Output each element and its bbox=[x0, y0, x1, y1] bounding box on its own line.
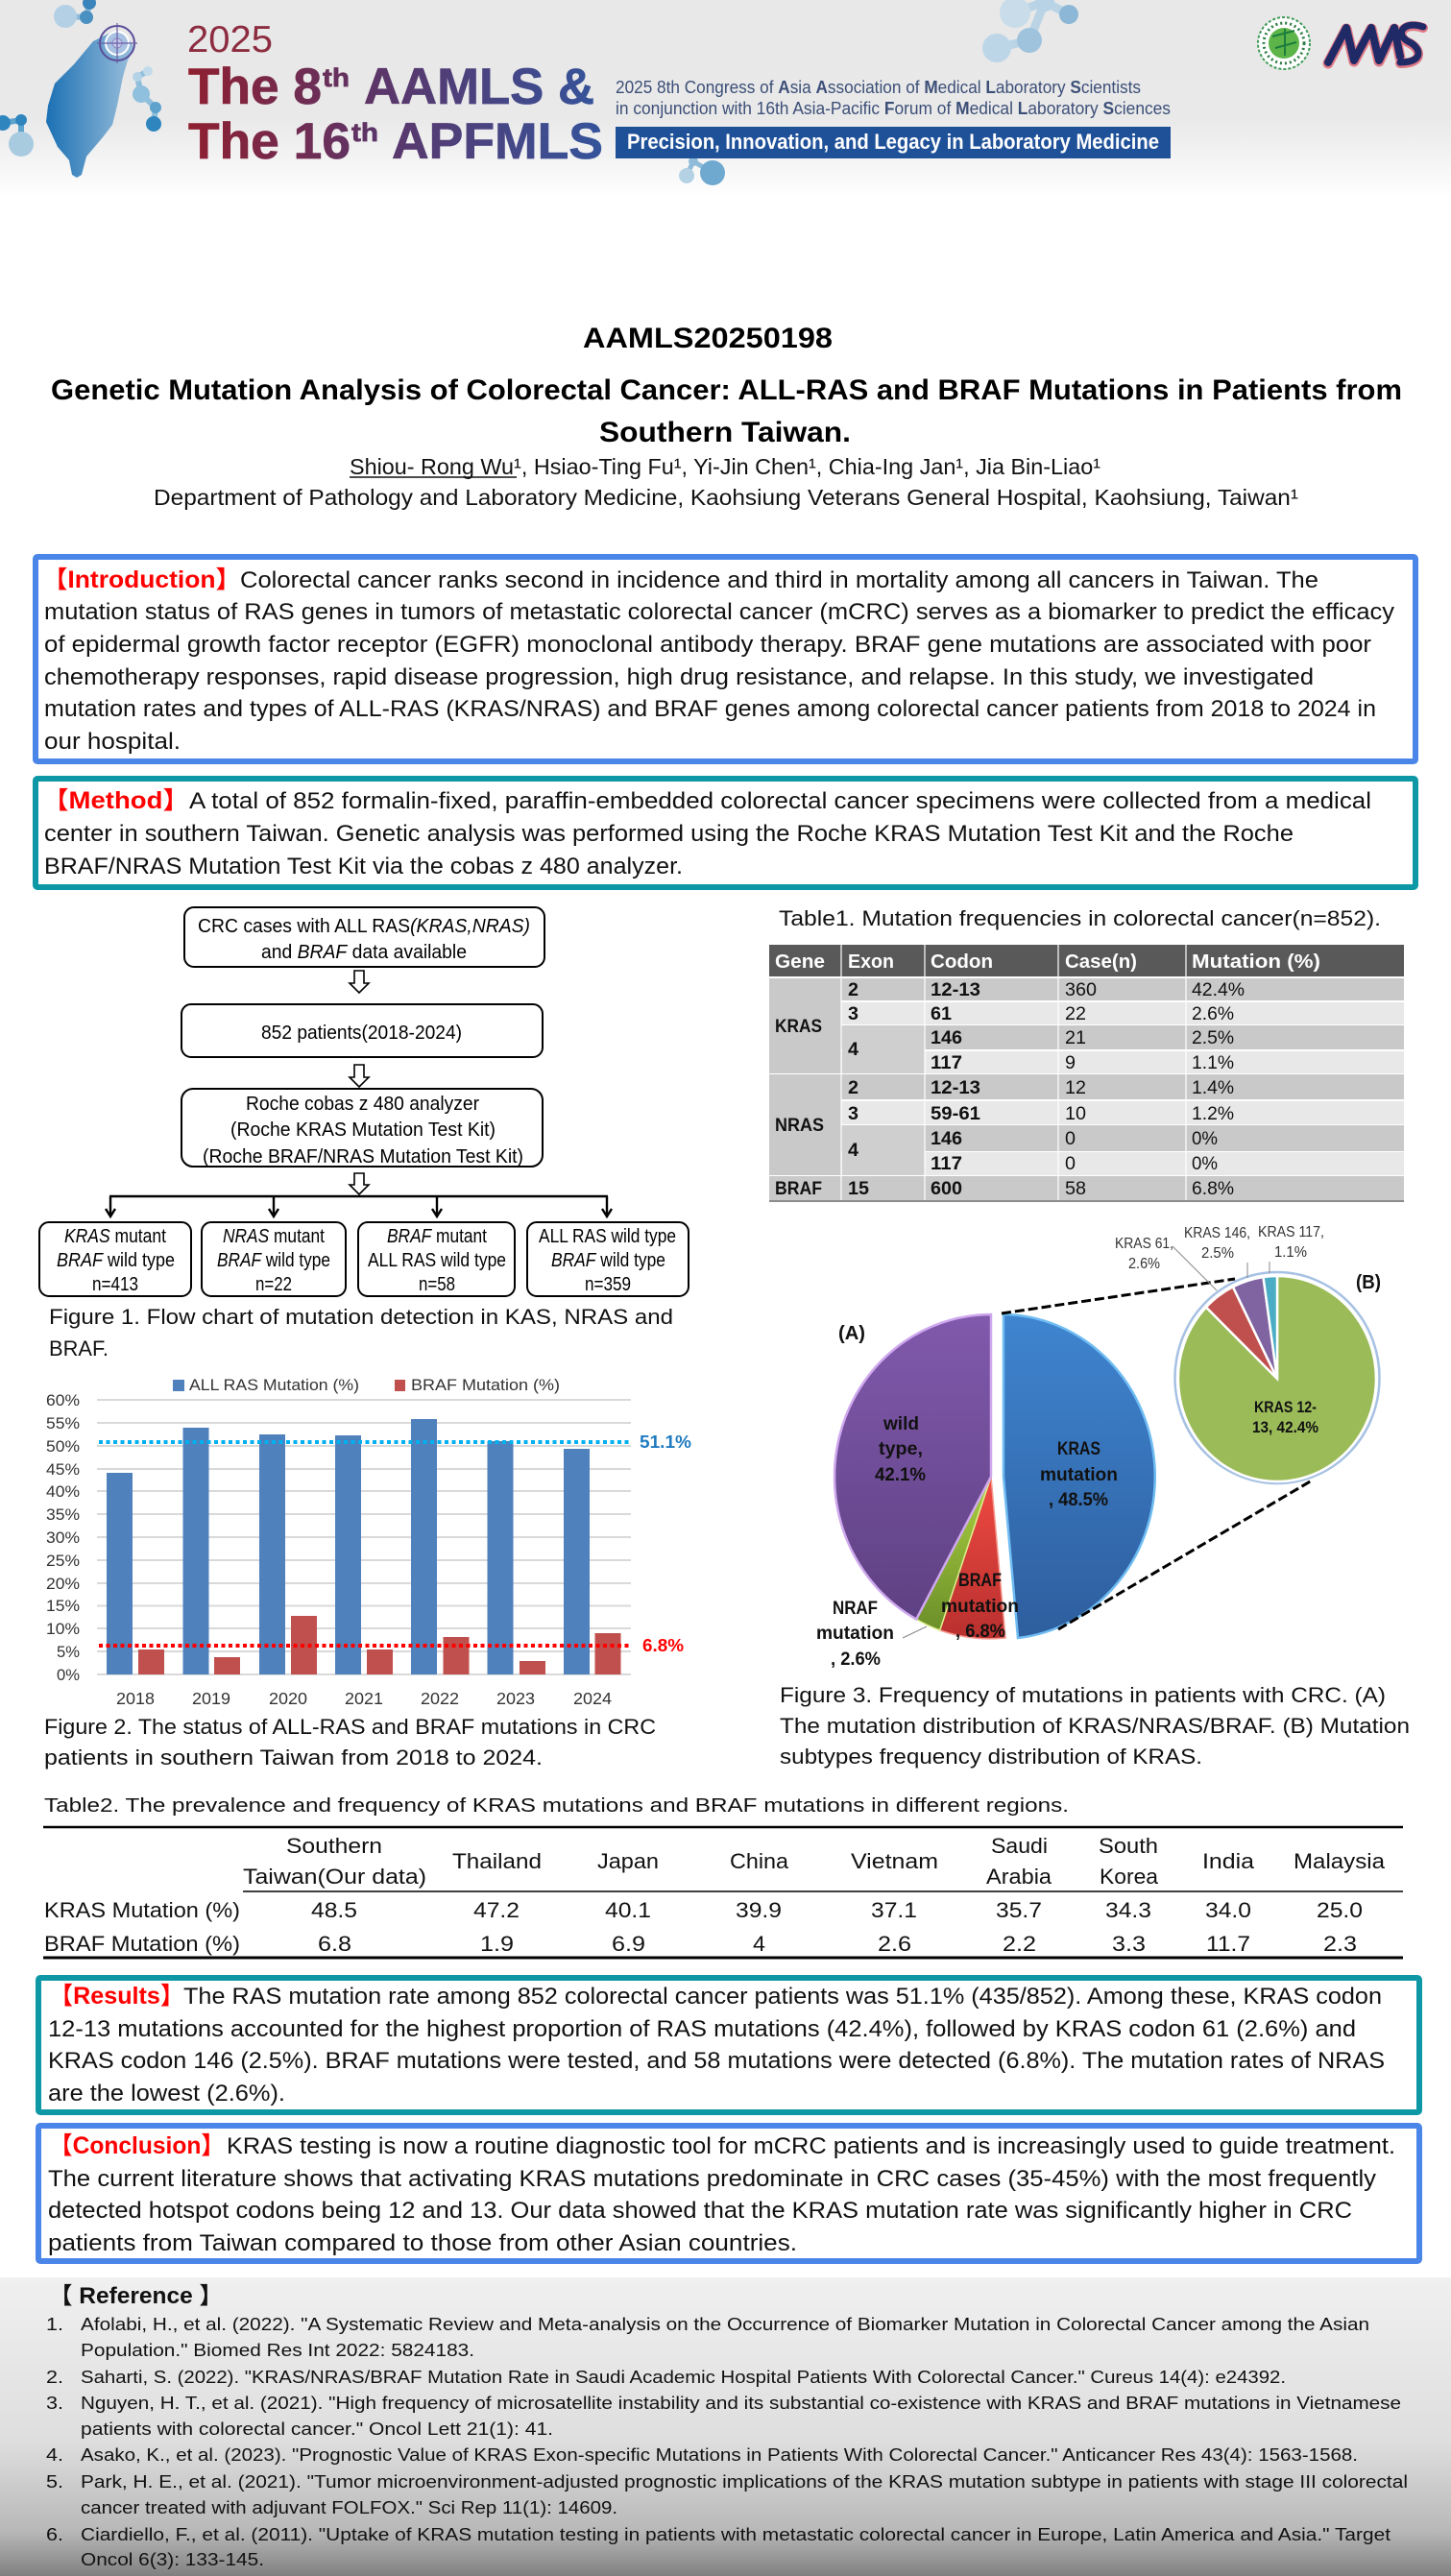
chart y axis: 35% bbox=[46, 1506, 80, 1524]
table 2 header: Arabia bbox=[986, 1865, 1052, 1889]
table 2 row: BRAF: 11.7 bbox=[1206, 1932, 1250, 1956]
banner title: The 8 bbox=[188, 59, 322, 115]
table 2 row: KRAS: 35.7 bbox=[996, 1898, 1042, 1922]
label: wild type slice: wild bbox=[883, 1413, 919, 1434]
chart y axis: 25% bbox=[46, 1553, 80, 1570]
label: KRAS 117 bbox=[1258, 1224, 1324, 1273]
heading: reference: 【 Reference 】 bbox=[49, 2283, 223, 2309]
table 2 header: India bbox=[1202, 1849, 1255, 1873]
table header bbox=[775, 951, 1320, 973]
icon: molecule decorations bbox=[0, 0, 1078, 185]
caption: figure 2: patients in southern Taiwan from 2018 to 2024. bbox=[44, 1745, 543, 1769]
chart x axis: 2022 bbox=[421, 1689, 459, 1708]
arrow: down 2 bbox=[350, 1065, 369, 1087]
banner title: APFMLS bbox=[392, 113, 603, 170]
bar chart: mutation by year bbox=[46, 1376, 691, 1708]
banner subtitle: 2025 8th Congress of Asia Association of Medical Laboratory Scientists bbox=[616, 77, 1141, 97]
table rows: KRAS: 3 bbox=[848, 1004, 859, 1024]
average line: BRAF bbox=[99, 1644, 631, 1648]
flow box: analyzer: Roche cobas z 480 analyzer bbox=[246, 1093, 479, 1115]
chart x axis: 2020 bbox=[269, 1689, 307, 1708]
panel: introduction bbox=[36, 557, 1415, 761]
caption: figure 1: BRAF. bbox=[49, 1336, 109, 1360]
flow box: CRC cases: and BRAF data available bbox=[261, 941, 467, 963]
label: wild type slice: type, bbox=[879, 1438, 923, 1459]
table rows: NRAS: 117 bbox=[931, 1154, 962, 1174]
table 2 header: Malaysia bbox=[1294, 1849, 1386, 1873]
text: introduction body: of epidermal growth factor receptor (EGFR) monoclonal antibody therapy. BRAF gene mutations are associated with poor bbox=[44, 632, 1371, 658]
flow box: patients bbox=[181, 1004, 543, 1057]
caption: table 2: Table2. The prevalence and frequency of KRAS mutations and BRAF mutations in different regions. bbox=[44, 1794, 1069, 1817]
label: KRAS 117: KRAS 117, bbox=[1258, 1224, 1324, 1240]
table 2 row: BRAF: 1.9 bbox=[480, 1932, 514, 1956]
table rows: KRAS: 2.5% bbox=[1192, 1028, 1234, 1048]
table rows: KRAS: 2 bbox=[848, 980, 859, 1000]
table rows: KRAS: 61 bbox=[931, 1004, 952, 1024]
flow box: BRAF mutant bbox=[358, 1222, 515, 1296]
table rows: KRAS: 22 bbox=[1065, 1004, 1086, 1024]
table row: BRAF: 58 bbox=[1065, 1179, 1086, 1199]
flow box: wild type: BRAF wild type bbox=[551, 1249, 665, 1271]
chart y axis: 30% bbox=[46, 1529, 80, 1547]
text: results body: 12-13 mutations accounted for the highest proportion of RAS mutations (42.4%), followed by KRAS codon 61 (2.6%) and bbox=[48, 2016, 1356, 2042]
table rows: NRAS: 59-61 bbox=[931, 1104, 980, 1124]
panel: method bbox=[36, 779, 1415, 887]
table 2 row: KRAS: 39.9 bbox=[736, 1898, 782, 1922]
flow box: analyzer bbox=[181, 1089, 543, 1168]
table rows: NRAS: 10 bbox=[1065, 1104, 1086, 1124]
banner title: th bbox=[351, 118, 378, 147]
table 2 row: KRAS: 37.1 bbox=[871, 1898, 917, 1922]
table header: Case(n) bbox=[1065, 951, 1137, 973]
table rows: KRAS: 12-13 bbox=[931, 980, 980, 1000]
text: conclusion body bbox=[48, 2133, 1395, 2256]
caption: figure 2 bbox=[44, 1715, 656, 1769]
reference 6: Ciardiello, F., et al. (2011). "Uptake of KRAS mutation testing in patients with metastatic colorectal cancer in Europe, Latin America and Asia." Target bbox=[81, 2524, 1391, 2544]
table row: BRAF: 6.8% bbox=[1192, 1179, 1234, 1199]
chart y axis: 15% bbox=[46, 1598, 80, 1615]
label: wild type slice: 42.1% bbox=[875, 1464, 926, 1485]
table 2 header: South bbox=[1099, 1834, 1158, 1858]
connector: dashed zoom lines bbox=[1002, 1279, 1312, 1629]
caption: figure 1 bbox=[49, 1305, 673, 1360]
flow box: KRAS mutant bbox=[39, 1222, 191, 1296]
label: KRAS 61 bbox=[1115, 1236, 1217, 1290]
table 2 header: Japan bbox=[597, 1849, 659, 1873]
heading: results: 【Results】 bbox=[49, 1983, 184, 2010]
table rows: KRAS bbox=[775, 980, 1245, 1073]
table rows: NRAS: 2 bbox=[848, 1078, 859, 1098]
reference 5: cancer treated with adjuvant FOLFOX." Sci Rep 11(1): 14609. bbox=[81, 2497, 617, 2517]
text: conclusion body: KRAS testing is now a routine diagnostic tool for mCRC patients and is increasingly used to guide treatment. bbox=[227, 2133, 1395, 2159]
chart y axis: 10% bbox=[46, 1621, 80, 1638]
slice: KRAS 12-13 bbox=[1178, 1276, 1376, 1481]
flow chart bbox=[39, 907, 689, 1296]
reference 3: Nguyen, H. T., et al. (2021). "High frequency of microsatellite instability and its substantial co-existence with KRAS and BRAF mutations in Vietnamese bbox=[81, 2393, 1401, 2413]
text: conclusion body: The current literature shows that activating KRAS mutations predominate in CRC cases (35-45%) with the most frequently bbox=[48, 2166, 1377, 2192]
text: method body: center in southern Taiwan. Genetic analysis was performed using the Roche KRAS Mutation Test Kit and the Roche bbox=[44, 821, 1294, 847]
table 2 row: BRAF: 6.9 bbox=[612, 1932, 645, 1956]
average line: all RAS bbox=[99, 1440, 631, 1444]
table rows: KRAS: 9 bbox=[1065, 1053, 1076, 1073]
chart y axis: 50% bbox=[46, 1438, 80, 1456]
flow box: patients: 852 patients(2018-2024) bbox=[261, 1022, 462, 1044]
chart x axis bbox=[116, 1689, 612, 1708]
table header: Mutation (%) bbox=[1192, 951, 1320, 973]
slice: BRAF mutation bbox=[940, 1477, 1005, 1639]
table 2 header: China bbox=[730, 1849, 789, 1873]
label: NRAF slice: NRAF bbox=[833, 1598, 878, 1619]
chart legend: BRAF Mutation (%) bbox=[411, 1376, 560, 1394]
table 1: mutation frequencies bbox=[769, 945, 1404, 1201]
flow box: KRAS mutant: n=413 bbox=[92, 1273, 138, 1295]
label: A: (A) bbox=[838, 1323, 865, 1344]
panel: results bbox=[38, 1978, 1419, 2112]
flow box: NRAS mutant: BRAF wild type bbox=[217, 1249, 330, 1271]
text: results body bbox=[48, 1984, 1385, 2107]
value label: BRAF average: 6.8% bbox=[642, 1636, 684, 1655]
table rows: NRAS: 12-13 bbox=[931, 1078, 980, 1098]
slice: KRAS 61 bbox=[1206, 1287, 1277, 1379]
table row: BRAF bbox=[775, 1179, 1234, 1199]
banner subtitle bbox=[616, 77, 1171, 118]
icon: Taiwan map bbox=[46, 23, 137, 178]
label: wild type slice bbox=[875, 1413, 926, 1485]
chart legend: ALL RAS Mutation (%) bbox=[189, 1376, 359, 1394]
label: KRAS 12-13: KRAS 12- bbox=[1254, 1398, 1317, 1416]
panel: references bbox=[0, 2277, 1451, 2576]
table header: Exon bbox=[848, 951, 894, 973]
table 2 row: KRAS: 47.2 bbox=[473, 1898, 520, 1922]
table 2 row: KRAS bbox=[44, 1898, 1363, 1922]
caption: figure 3 bbox=[780, 1683, 1410, 1769]
slice: KRAS 146 bbox=[1233, 1277, 1277, 1379]
table row: BRAF: 600 bbox=[931, 1179, 962, 1199]
table 2 row: KRAS: 25.0 bbox=[1317, 1898, 1363, 1922]
flow box: BRAF mutant: BRAF mutant bbox=[387, 1225, 487, 1247]
flow box: NRAS mutant bbox=[202, 1222, 346, 1296]
label: BRAF slice bbox=[941, 1570, 1019, 1642]
caption: figure 3: The mutation distribution of KRAS/NRAS/BRAF. (B) Mutation bbox=[780, 1714, 1410, 1738]
label: NRAF slice: , 2.6% bbox=[831, 1649, 881, 1670]
slice: KRAS mutation bbox=[1004, 1314, 1155, 1638]
table 2 header: Saudi bbox=[991, 1834, 1048, 1858]
table 2 header: Vietnam bbox=[851, 1849, 938, 1873]
label: KRAS 61: 2.6% bbox=[1128, 1256, 1160, 1272]
caption: figure 3: Figure 3. Frequency of mutations in patients with CRC. (A) bbox=[780, 1683, 1386, 1707]
table rows: NRAS: 3 bbox=[848, 1104, 859, 1124]
table rows: KRAS: 117 bbox=[931, 1053, 962, 1073]
text: introduction body: mutation status of RAS genes in tumors of metastatic colorectal cancer (mCRC) serves as a biomarker to predict the efficacy bbox=[44, 599, 1395, 625]
flow box: BRAF mutant: ALL RAS wild type bbox=[368, 1249, 506, 1271]
chart x axis: 2024 bbox=[573, 1689, 612, 1708]
icon: society seal bbox=[1258, 17, 1310, 69]
label: KRAS slice bbox=[1040, 1438, 1118, 1510]
table 2 row: BRAF: 2.2 bbox=[1003, 1932, 1036, 1956]
reference 6 bbox=[46, 2524, 1391, 2569]
title: Genetic Mutation Analysis of Colorectal Cancer: ALL-RAS and BRAF Mutations in Patients from bbox=[51, 374, 1402, 406]
banner slogan: Precision, Innovation, and Legacy in Laboratory Medicine bbox=[627, 130, 1159, 154]
table rows: NRAS: 1.2% bbox=[1192, 1104, 1234, 1124]
reference 5: 5. bbox=[46, 2471, 63, 2492]
label: NRAF slice bbox=[816, 1598, 927, 1670]
slice: KRAS 117 bbox=[1264, 1276, 1277, 1379]
table header: Codon bbox=[931, 951, 993, 973]
reference 1: Population." Biomed Res Int 2022: 5824183. bbox=[81, 2340, 474, 2360]
table rows: KRAS: 4 bbox=[848, 1040, 859, 1060]
label: KRAS 61: KRAS 61, bbox=[1115, 1236, 1173, 1252]
table 2 row: KRAS: 40.1 bbox=[605, 1898, 651, 1922]
label: KRAS slice: mutation bbox=[1040, 1464, 1118, 1485]
label: KRAS 12-13: 13, 42.4% bbox=[1252, 1418, 1318, 1436]
text: introduction body: our hospital. bbox=[44, 729, 181, 755]
table 2: regional comparison bbox=[43, 1827, 1403, 1958]
table 2 row: KRAS: 34.3 bbox=[1105, 1898, 1151, 1922]
caption: figure 3: subtypes frequency distribution of KRAS. bbox=[780, 1745, 1202, 1769]
table rows: KRAS: 360 bbox=[1065, 980, 1097, 1000]
table 2 row: BRAF bbox=[44, 1932, 1357, 1956]
banner title: th bbox=[323, 63, 350, 92]
table rows: NRAS: 0 bbox=[1065, 1129, 1076, 1149]
table 2 row: BRAF: 2.3 bbox=[1323, 1932, 1357, 1956]
text: introduction body: mutation rates and types of ALL-RAS (KRAS/NRAS) and BRAF genes among colorectal cancer patients from 2018 to 2024 in bbox=[44, 696, 1376, 722]
label: KRAS 146 bbox=[1184, 1225, 1250, 1278]
flow box: CRC cases: CRC cases with ALL RAS(KRAS,NRAS) bbox=[198, 915, 530, 937]
arrow: down 3 bbox=[350, 1173, 369, 1194]
heading: method: 【Method】 bbox=[42, 787, 189, 814]
table 2 header: Southern bbox=[286, 1834, 382, 1858]
title bbox=[51, 374, 1402, 448]
reference 5 bbox=[46, 2471, 1408, 2517]
banner subtitle: in conjunction with 16th Asia-Pacific Forum of Medical Laboratory Sciences bbox=[616, 98, 1171, 118]
table 2 row: KRAS: KRAS Mutation (%) bbox=[44, 1898, 240, 1922]
flow box: NRAS mutant: NRAS mutant bbox=[223, 1225, 325, 1247]
table rows: NRAS: NRAS bbox=[775, 1116, 824, 1136]
table 2 row: BRAF: 4 bbox=[753, 1932, 765, 1956]
table row: BRAF: BRAF bbox=[775, 1179, 822, 1199]
table rows: NRAS: 12 bbox=[1065, 1078, 1086, 1098]
table 2 header: Thailand bbox=[452, 1849, 542, 1873]
table 2 row: BRAF: 3.3 bbox=[1112, 1932, 1146, 1956]
table 2 row: BRAF: BRAF Mutation (%) bbox=[44, 1932, 240, 1956]
chart bars: BRAF bbox=[138, 1616, 620, 1674]
chart y axis: 45% bbox=[46, 1461, 80, 1479]
text: results body: are the lowest (2.6%). bbox=[48, 2081, 285, 2107]
table rows: KRAS: 21 bbox=[1065, 1028, 1086, 1048]
reference 6: 6. bbox=[46, 2524, 63, 2544]
flow box: wild type: n=359 bbox=[585, 1273, 631, 1295]
table row: BRAF: 15 bbox=[848, 1179, 869, 1199]
slice: wild type bbox=[834, 1314, 991, 1619]
text: conclusion body: patients from Taiwan compared to those from other Asian countries. bbox=[48, 2230, 797, 2256]
label: BRAF slice: BRAF bbox=[958, 1570, 1002, 1591]
label: BRAF slice: , 6.8% bbox=[955, 1621, 1005, 1642]
label: KRAS 117: 1.1% bbox=[1274, 1244, 1307, 1261]
table header: Gene bbox=[775, 951, 825, 973]
affiliation: Department of Pathology and Laboratory Medicine, Kaohsiung Veterans General Hospital, Kaohsiung, Taiwan¹ bbox=[154, 485, 1298, 510]
icon: MMS logo bbox=[1328, 25, 1423, 63]
pie chart: KRAS subtypes (B) bbox=[1115, 1224, 1381, 1483]
poster id: AAMLS20250198 bbox=[583, 323, 833, 354]
chart legend bbox=[173, 1376, 560, 1394]
reference 4: Asako, K., et al. (2023). "Prognostic Value of KRAS Exon-specific Mutations in Patients With Colorectal Cancer." Anticancer Res 43(4): 1563-1568. bbox=[81, 2444, 1358, 2465]
reference 5: Park, H. E., et al. (2021). "Tumor microenvironment-adjusted prognostic implications of the KRAS mutation subtype in patients with stage III colorectal bbox=[81, 2471, 1408, 2492]
flow box: KRAS mutant: BRAF wild type bbox=[57, 1249, 175, 1271]
table 2 header: Korea bbox=[1100, 1865, 1159, 1889]
text: results body: KRAS codon 146 (2.5%). BRAF mutations were tested, and 58 mutations were detected (6.8%). The mutation rates of NRAS bbox=[48, 2048, 1385, 2074]
label: B: (B) bbox=[1356, 1272, 1381, 1293]
chart x axis: 2021 bbox=[345, 1689, 383, 1708]
flow box: NRAS mutant: n=22 bbox=[255, 1273, 292, 1295]
banner title bbox=[188, 59, 603, 170]
table 2 row: KRAS: 34.0 bbox=[1205, 1898, 1251, 1922]
chart y axis: 5% bbox=[57, 1644, 80, 1661]
header banner bbox=[0, 0, 1451, 197]
flow box: analyzer: (Roche BRAF/NRAS Mutation Test Kit) bbox=[203, 1145, 523, 1168]
reference 6: Oncol 6(3): 133-145. bbox=[81, 2549, 264, 2569]
chart y axis: 0% bbox=[57, 1667, 80, 1684]
banner year: 2025 bbox=[187, 19, 273, 60]
flow box: analyzer: (Roche KRAS Mutation Test Kit) bbox=[230, 1119, 496, 1141]
text: method body bbox=[44, 788, 1371, 879]
table rows: NRAS: 1.4% bbox=[1192, 1078, 1234, 1098]
banner title: The 16 bbox=[188, 113, 351, 170]
text: introduction body bbox=[44, 567, 1395, 755]
panel: conclusion bbox=[38, 2126, 1419, 2261]
reference 4: 4. bbox=[46, 2444, 63, 2465]
table rows: KRAS: 42.4% bbox=[1192, 980, 1245, 1000]
heading: introduction: 【Introduction】 bbox=[42, 566, 241, 593]
table rows: KRAS: 1.1% bbox=[1192, 1053, 1234, 1073]
label: KRAS 146: KRAS 146, bbox=[1184, 1225, 1250, 1241]
table 2 header: Taiwan(Our data) bbox=[243, 1865, 426, 1889]
text: method body: BRAF/NRAS Mutation Test Kit via the cobas z 480 analyzer. bbox=[44, 854, 683, 879]
text: conclusion body: detected hotspot codons being 12 and 13. Our data showed that the KRAS mutation rate was significantly higher in CRC bbox=[48, 2198, 1352, 2224]
banner title: AAMLS & bbox=[364, 59, 594, 115]
pie chart: overall mutation distribution (A) bbox=[816, 1314, 1155, 1670]
table rows: KRAS: 146 bbox=[931, 1028, 962, 1048]
arrows: split to four groups bbox=[106, 1196, 612, 1216]
table 2 row: KRAS: 48.5 bbox=[311, 1898, 357, 1922]
label: NRAF slice: mutation bbox=[816, 1623, 894, 1644]
table rows: NRAS: 4 bbox=[848, 1141, 859, 1161]
reference 2: Saharti, S. (2022). "KRAS/NRAS/BRAF Mutation Rate in Saudi Academic Hospital Patients With Colorectal Cancer." Cureus 14(4): e24392. bbox=[81, 2367, 1286, 2387]
chart y axis: 20% bbox=[46, 1576, 80, 1593]
reference 3: patients with colorectal cancer." Oncol Lett 21(1): 41. bbox=[81, 2419, 553, 2439]
flow box: KRAS mutant: KRAS mutant bbox=[64, 1225, 166, 1247]
table 2 header bbox=[243, 1834, 1386, 1889]
caption: table 1: Table1. Mutation frequencies in colorectal cancer(n=852). bbox=[779, 906, 1381, 930]
reference 1 bbox=[46, 2314, 1369, 2360]
slice: NRAF mutation bbox=[916, 1477, 991, 1630]
table rows: NRAS: 0% bbox=[1192, 1154, 1218, 1174]
heading: conclusion: 【Conclusion】 bbox=[49, 2132, 225, 2159]
chart bars: all RAS bbox=[107, 1419, 590, 1674]
label: KRAS slice: , 48.5% bbox=[1049, 1489, 1108, 1510]
label: KRAS slice: KRAS bbox=[1057, 1438, 1100, 1459]
reference 2: 2. bbox=[46, 2367, 63, 2387]
chart x axis: 2023 bbox=[496, 1689, 535, 1708]
text: introduction body: chemotherapy responses, rapid disease progression, high drug resistance, and relapse. In this study, we investigated bbox=[44, 664, 1314, 690]
table 2 row: BRAF: 6.8 bbox=[318, 1932, 351, 1956]
flow box: wild type bbox=[527, 1222, 689, 1296]
caption: figure 2: Figure 2. The status of ALL-RAS and BRAF mutations in CRC bbox=[44, 1715, 656, 1739]
label: KRAS 146: 2.5% bbox=[1201, 1245, 1234, 1262]
reference 3: 3. bbox=[46, 2393, 63, 2413]
table rows: NRAS: 146 bbox=[931, 1129, 962, 1149]
flow box: wild type: ALL RAS wild type bbox=[539, 1225, 676, 1247]
caption: figure 1: Figure 1. Flow chart of mutation detection in KAS, NRAS and bbox=[49, 1305, 673, 1329]
chart y axis bbox=[46, 1392, 80, 1684]
arrow: down 1 bbox=[350, 971, 369, 993]
chart x axis: 2019 bbox=[192, 1689, 230, 1708]
chart y axis: 60% bbox=[46, 1392, 80, 1409]
table rows: NRAS: 0 bbox=[1065, 1154, 1076, 1174]
table rows: KRAS: KRAS bbox=[775, 1017, 822, 1037]
value label: all RAS average: 51.1% bbox=[640, 1432, 691, 1452]
chart y axis: 55% bbox=[46, 1415, 80, 1432]
flow box: CRC cases bbox=[184, 907, 544, 967]
reference 1: Afolabi, H., et al. (2022). "A Systematic Review and Meta-analysis on the Occurrence of Biomarker Mutation in Colorectal Cancer among the Asian bbox=[81, 2314, 1369, 2334]
table rows: NRAS: 0% bbox=[1192, 1129, 1218, 1149]
authors: Shiou- Rong Wu¹, Hsiao-Ting Fu¹, Yi-Jin Chen¹, Chia-Ing Jan¹, Jia Bin-Liao¹ bbox=[350, 454, 1100, 479]
text: results body: The RAS mutation rate among 852 colorectal cancer patients was 51.1% (435/852). Among these, KRAS codon bbox=[183, 1984, 1382, 2010]
label: BRAF slice: mutation bbox=[941, 1596, 1019, 1617]
text: method body: A total of 852 formalin-fixed, paraffin-embedded colorectal cancer specimens were collected from a medical bbox=[189, 788, 1371, 814]
table rows: NRAS bbox=[775, 1078, 1234, 1174]
reference 3 bbox=[46, 2393, 1401, 2439]
label: KRAS 12-13 bbox=[1252, 1398, 1318, 1436]
table 2 row: BRAF: 2.6 bbox=[878, 1932, 911, 1956]
chart y axis: 40% bbox=[46, 1483, 80, 1501]
flow box: BRAF mutant: n=58 bbox=[419, 1273, 455, 1295]
reference 1: 1. bbox=[46, 2314, 63, 2334]
text: introduction body: Colorectal cancer ranks second in incidence and third in mortality among all cancers in Taiwan. The bbox=[240, 567, 1318, 593]
chart x axis: 2018 bbox=[116, 1689, 155, 1708]
title: Southern Taiwan. bbox=[599, 417, 851, 448]
table rows: KRAS: 2.6% bbox=[1192, 1004, 1234, 1024]
